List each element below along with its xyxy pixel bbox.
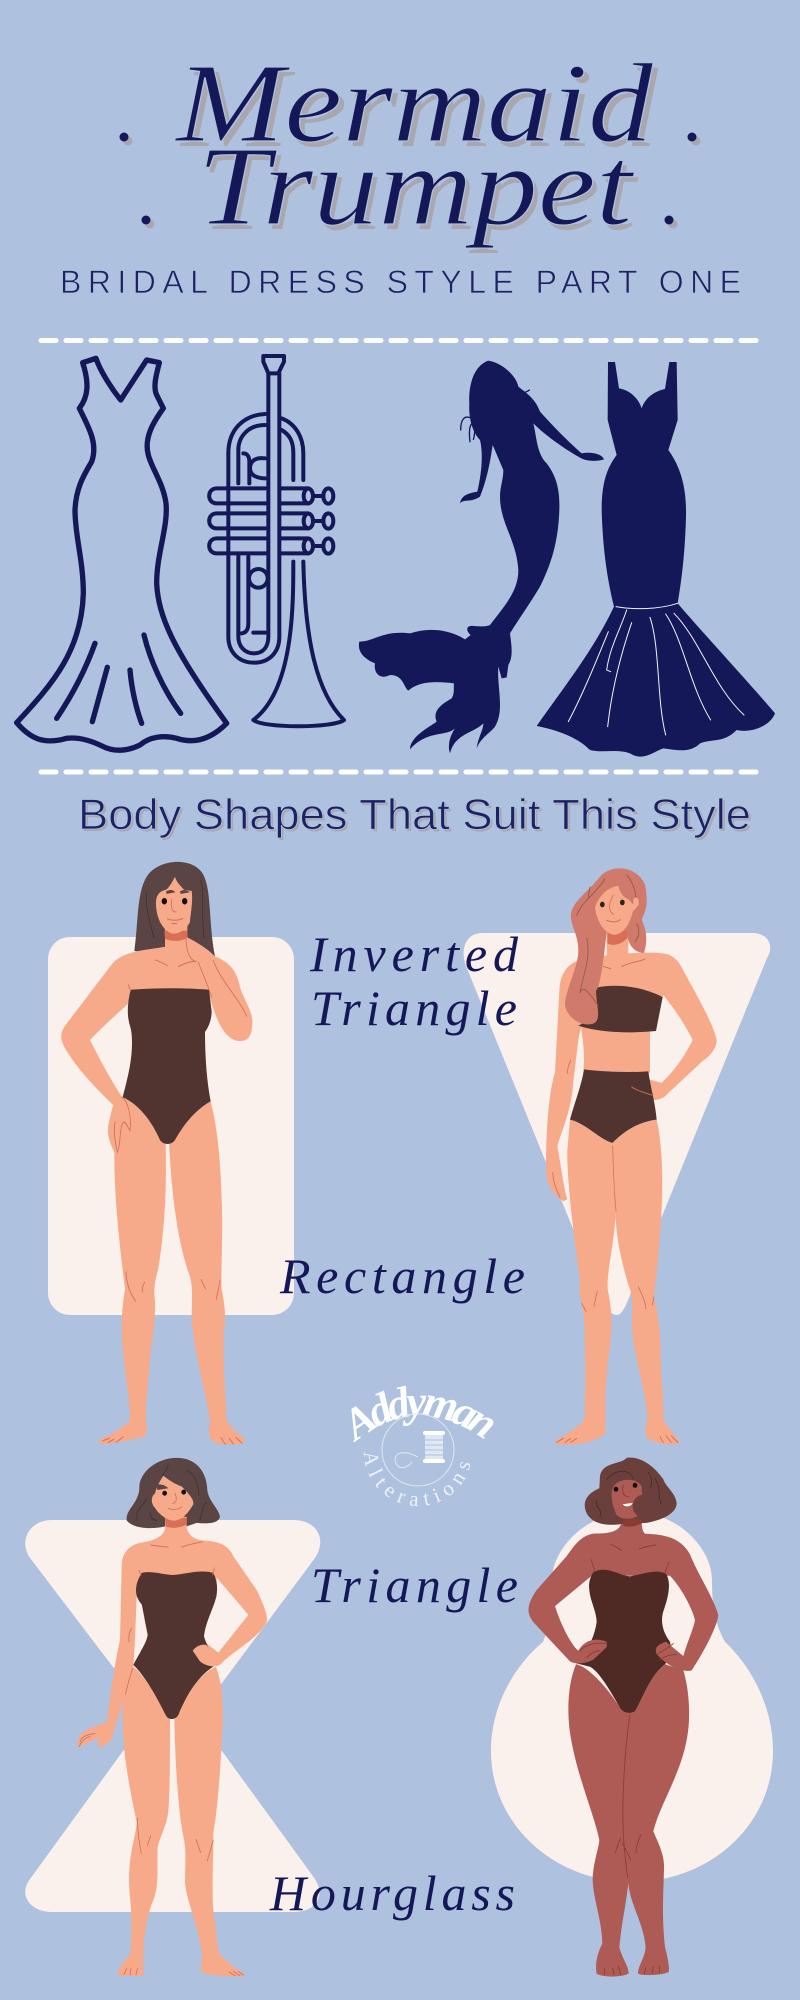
figure: woman with long dark hair, rectangle shape bbox=[61, 862, 252, 1444]
title: Mermaid Trumpet: Trumpet bbox=[201, 129, 639, 254]
icon: thread spool and needle bbox=[382, 1414, 454, 1486]
label: Inverted Triangle bbox=[309, 926, 519, 1036]
icon: trumpet bbox=[209, 356, 344, 726]
panel: inverted triangle shape bbox=[464, 933, 770, 1315]
title: Mermaid Trumpet: Mermaid bbox=[174, 41, 654, 166]
label: Rectangle: Rectangle bbox=[279, 1248, 525, 1304]
label: Triangle: Triangle bbox=[311, 1557, 518, 1613]
subtitle: BRIDAL DRESS STYLE PART ONE bbox=[60, 264, 741, 300]
panel: rectangle shape bbox=[48, 937, 294, 1315]
label: Hourglass: Hourglass bbox=[269, 1865, 515, 1921]
figure: woman with short wavy hair, hourglass shape bbox=[77, 1458, 267, 1976]
logo: Addyman Alterations bbox=[351, 1386, 494, 1506]
title: Mermaid Trumpet bbox=[120, 41, 700, 254]
heading: body shapes: Body Shapes That Suit This Style bbox=[80, 793, 753, 841]
icon: mermaid silhouette bbox=[359, 361, 604, 753]
title: Mermaid Trumpet: Trumpet bbox=[197, 124, 635, 249]
icon: outlined V-neck mermaid dress bbox=[17, 358, 227, 750]
figure: curvy woman with brown curly hair, pear shape bbox=[529, 1458, 718, 1977]
panel: pear shape bbox=[491, 1512, 773, 1882]
icon: solid sweetheart mermaid gown bbox=[537, 362, 775, 757]
panel: hourglass shape bbox=[25, 1520, 320, 1912]
figure: woman with long auburn hair, inverted triangle shape bbox=[546, 868, 717, 1445]
heading: body shapes: Body Shapes That Suit This Style bbox=[78, 791, 751, 839]
title: Mermaid Trumpet: Mermaid bbox=[179, 46, 659, 171]
label: Inverted Triangle: Inverted bbox=[309, 926, 519, 982]
logo: Addyman Alterations: Addyman bbox=[351, 1386, 494, 1442]
logo: Addyman Alterations: Alterations bbox=[364, 1452, 470, 1506]
label: Inverted Triangle: Triangle bbox=[311, 980, 517, 1036]
